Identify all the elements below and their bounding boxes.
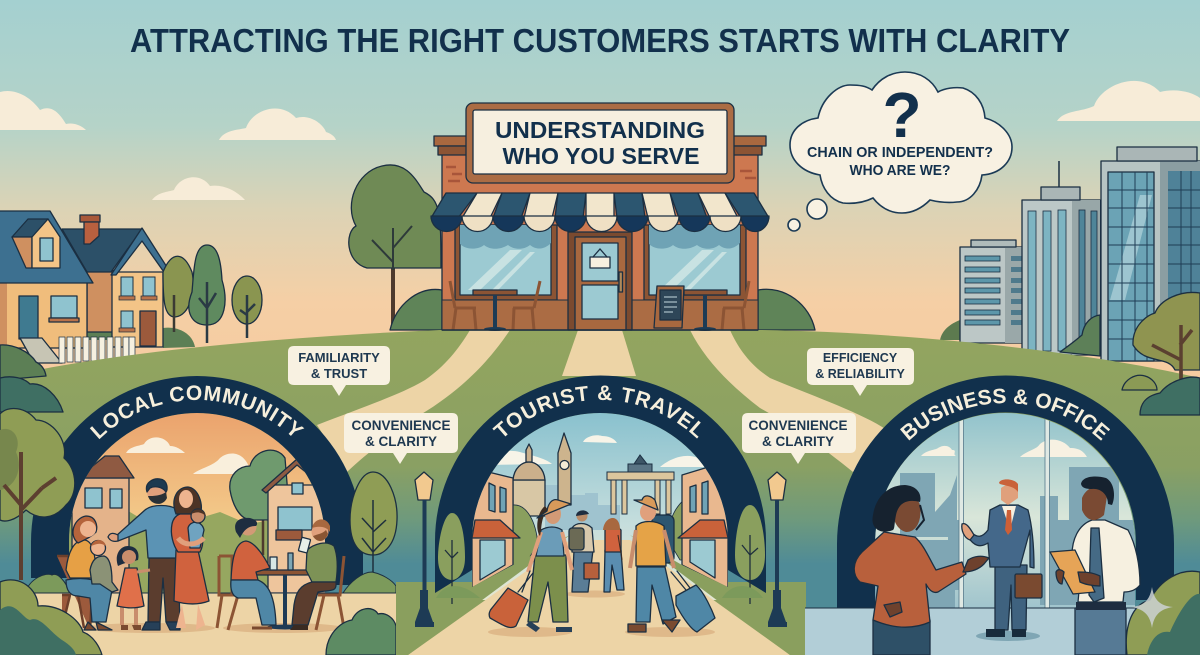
foreground right bush shade xyxy=(1147,594,1200,655)
arch label: TOURIST & TRAVEL xyxy=(492,386,701,438)
dark bush xyxy=(1140,377,1200,415)
arch xyxy=(837,375,1174,608)
roads xyxy=(317,330,887,472)
brick details xyxy=(446,167,756,181)
callout: familiarity and trust xyxy=(288,346,390,396)
office floor xyxy=(805,608,1200,655)
callout: efficiency and reliability: EFFICIENCY xyxy=(823,351,898,365)
callout: familiarity and trust: FAMILIARITY xyxy=(298,350,380,365)
road: center xyxy=(562,330,636,376)
callout: convenience and clarity right: CONVENIENCE xyxy=(748,418,848,433)
plaza ground xyxy=(0,593,396,655)
foreground left bush xyxy=(0,580,102,655)
awning xyxy=(431,193,769,232)
sign board xyxy=(466,103,734,183)
left neighbourhood houses xyxy=(0,211,195,363)
panel: tourist and travel xyxy=(396,376,806,655)
callout: convenience and clarity left: CONVENIENCE xyxy=(351,418,451,433)
scene: left shops xyxy=(472,470,520,588)
person: woman with orange suitcase xyxy=(489,500,572,632)
right hillside bushes and tree xyxy=(1122,292,1200,415)
scene: side green xyxy=(396,582,806,655)
landmark: gate xyxy=(607,455,674,514)
sandwich board xyxy=(654,286,684,328)
front steps xyxy=(20,338,62,363)
building: glass tower xyxy=(1101,147,1200,361)
center man shadow xyxy=(976,631,1040,641)
arch label: BUSINESS & OFFICE xyxy=(900,388,1110,441)
hilltop tree xyxy=(1133,292,1200,388)
person: woman holding baby xyxy=(171,487,209,630)
callout: convenience and clarity left xyxy=(344,413,458,464)
clouds xyxy=(0,81,1200,200)
person: background traveler with backpack xyxy=(569,510,599,592)
bush by center building xyxy=(1060,315,1100,356)
shop xyxy=(431,103,769,331)
brick walls xyxy=(442,153,758,330)
walkway xyxy=(408,540,790,655)
scene: tree xyxy=(230,450,290,555)
tree beside shop xyxy=(349,165,441,330)
lamp: right xyxy=(768,472,787,627)
cornice xyxy=(434,136,766,155)
thought bubble: WHO ARE WE? xyxy=(850,162,950,179)
scene: left house xyxy=(72,456,134,593)
sign board: WHO YOU SERVE xyxy=(502,143,700,169)
person: man in blue sweater xyxy=(108,479,180,630)
tree: tall green xyxy=(189,245,225,343)
bushes beside shop xyxy=(390,289,815,330)
scene: skyline xyxy=(875,467,1135,608)
house: back right xyxy=(62,215,172,347)
building: center xyxy=(1022,161,1100,355)
scene: right shops xyxy=(678,465,728,588)
large left tree xyxy=(0,408,75,580)
left hillside bush xyxy=(0,345,63,412)
tree: small olive xyxy=(232,276,262,338)
door xyxy=(568,232,632,330)
title: ATTRACTING THE RIGHT CUSTOMERS STARTS WITH CLARITY xyxy=(130,22,1070,59)
left background trees xyxy=(163,245,262,343)
scene clouds xyxy=(921,440,1087,457)
panel: local community xyxy=(0,376,398,655)
thought bubble xyxy=(788,72,1012,231)
hill xyxy=(0,330,1200,655)
person: man in suit with briefcase xyxy=(962,479,1042,637)
arch scene: city sky xyxy=(472,413,728,600)
question mark: ? xyxy=(882,79,922,151)
callout: efficiency and reliability xyxy=(807,348,914,396)
arch xyxy=(435,376,766,593)
road: left xyxy=(317,330,510,472)
person: woman in rust blazer xyxy=(854,485,989,655)
tree: tourist left xyxy=(436,513,480,604)
foreground right bush xyxy=(326,609,396,655)
small olive bush xyxy=(1122,375,1157,390)
tree: tourist right xyxy=(722,505,765,604)
person: background woman in red xyxy=(603,518,624,592)
white picket fence xyxy=(59,337,135,363)
walkway shadows xyxy=(488,590,715,637)
scene: hills xyxy=(69,512,323,592)
scene: right house xyxy=(262,459,330,593)
right cafe table and chairs xyxy=(684,281,749,331)
scene clouds xyxy=(497,450,552,465)
right window xyxy=(644,225,746,300)
sign text: UNDERSTANDING xyxy=(495,117,705,143)
foreground right bush xyxy=(1126,571,1200,655)
callout: convenience and clarity right xyxy=(742,413,856,464)
cafe table xyxy=(250,553,320,630)
bushes between houses xyxy=(86,307,195,348)
person: man with blue suitcase xyxy=(628,496,715,632)
person: seated mother and toddler xyxy=(57,516,118,630)
house: front left xyxy=(0,211,93,363)
panel: business and office xyxy=(805,376,1200,655)
arch xyxy=(31,376,363,585)
landmark: domed capitol xyxy=(513,444,545,516)
walkway grass edges xyxy=(396,535,806,655)
landmark: clock tower xyxy=(558,433,571,505)
road: right xyxy=(690,330,887,472)
callout: convenience and clarity left: & CLARITY xyxy=(365,434,437,449)
arch label: LOCAL COMMUNITY xyxy=(90,385,304,440)
lower wall panels xyxy=(442,300,758,330)
scene: skyline xyxy=(545,485,620,530)
person: seated man with phone xyxy=(290,519,344,630)
sky background xyxy=(0,0,1200,420)
arch scene: office window xyxy=(870,405,1140,610)
tree: olive round xyxy=(163,256,193,332)
low bushes xyxy=(25,572,396,593)
seating shadows xyxy=(85,623,343,633)
watermark sparkle xyxy=(1131,587,1173,628)
lamp: left xyxy=(415,472,434,627)
callout: efficiency and reliability: & RELIABILITY xyxy=(815,367,905,381)
person: man with clipboard xyxy=(1050,476,1140,655)
callout: convenience and clarity right: & CLARITY xyxy=(762,434,834,449)
person: seated woman xyxy=(217,518,276,630)
clouds in scene xyxy=(126,437,185,453)
thought text: CHAIN OR INDEPENDENT? xyxy=(807,144,993,161)
foreground left bush shade xyxy=(0,606,76,655)
left cafe table and chairs xyxy=(450,281,540,331)
right city buildings xyxy=(940,147,1200,361)
person: little girl xyxy=(117,546,150,630)
building: far left xyxy=(960,240,1022,343)
bush behind far building xyxy=(940,320,960,340)
scene: street trees xyxy=(514,502,682,565)
right small tree xyxy=(350,472,397,582)
callout: familiarity and trust: & TRUST xyxy=(311,366,367,381)
left window xyxy=(455,225,557,300)
arch scene: sunset xyxy=(69,413,325,592)
window mullions xyxy=(959,405,1050,610)
